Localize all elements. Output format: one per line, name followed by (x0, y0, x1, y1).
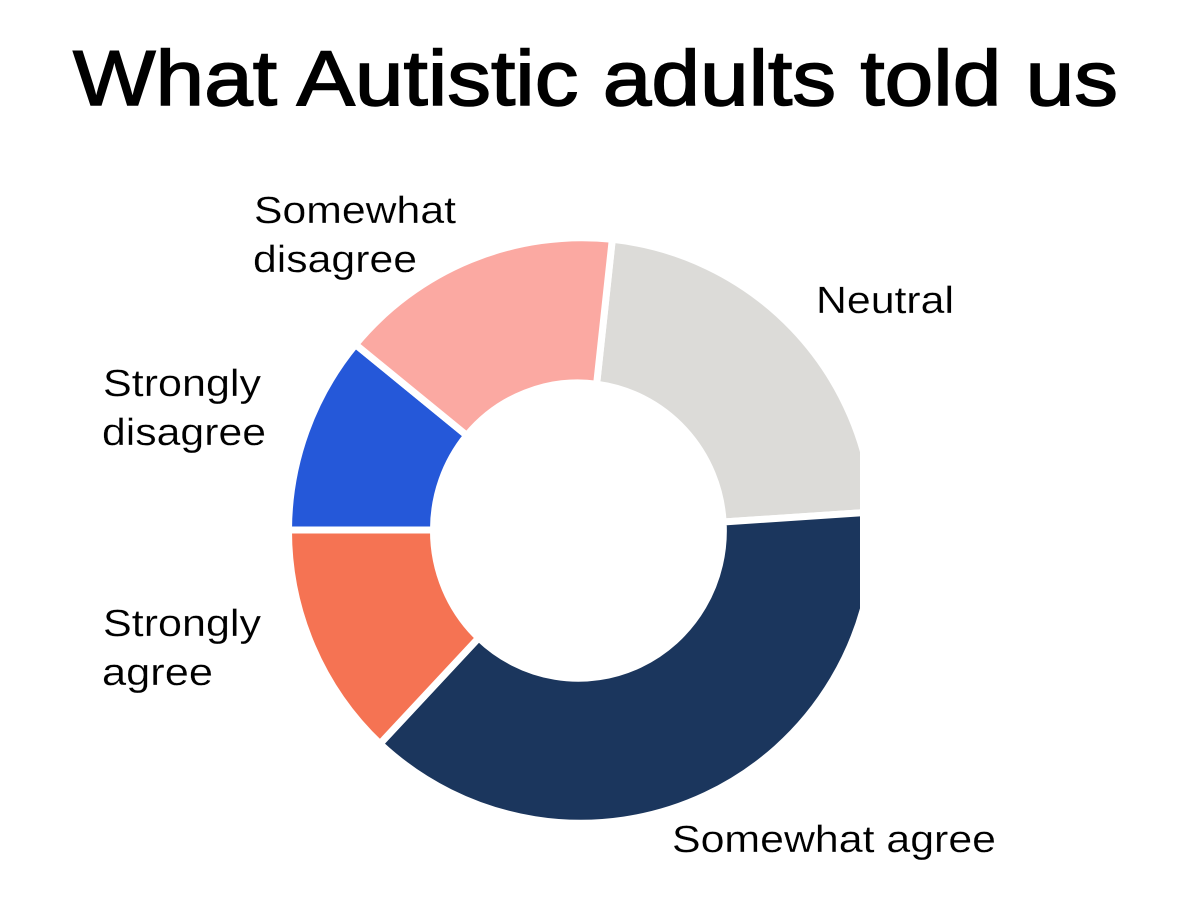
label: somewhat disagree: disagree (253, 239, 417, 281)
label: strongly agree: Strongly (103, 603, 261, 645)
segment: somewhat agree (380, 512, 874, 823)
label: somewhat disagree: Somewhat (254, 190, 456, 232)
label: strongly disagree (102, 363, 266, 454)
label: somewhat disagree (253, 190, 456, 281)
label: strongly agree (102, 603, 261, 694)
label: strongly agree: agree (102, 652, 213, 694)
segment: strongly agree (288, 530, 479, 744)
label: strongly disagree: Strongly (103, 363, 261, 405)
label: somewhat agree: Somewhat agree (672, 819, 996, 861)
segment: somewhat disagree (356, 238, 612, 436)
label: strongly disagree: disagree (102, 412, 266, 454)
title: What Autistic adults told us (73, 34, 1118, 122)
label: neutral: Neutral (816, 280, 954, 322)
donut chart (288, 238, 874, 823)
segment: neutral (597, 239, 874, 522)
segment: strongly disagree (288, 344, 467, 530)
